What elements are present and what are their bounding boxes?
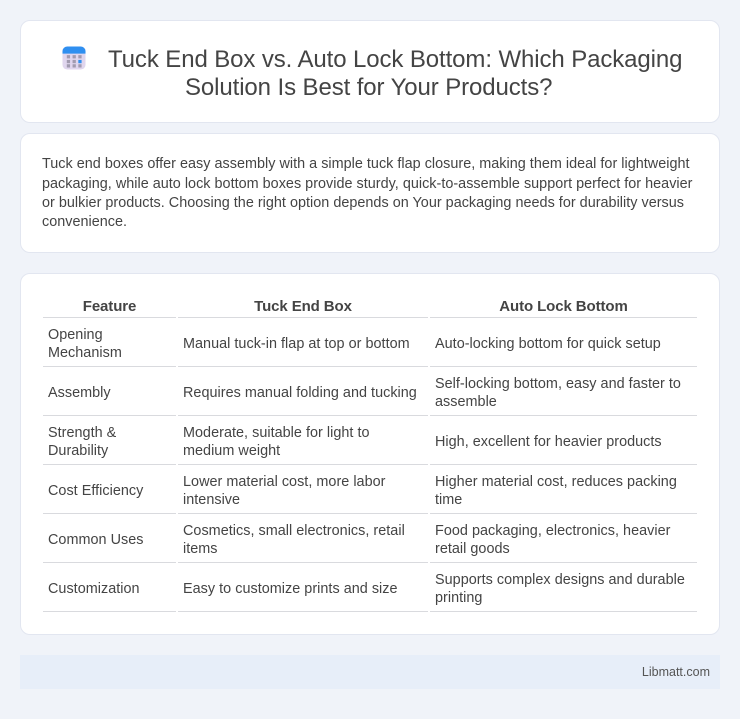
- row: opening mechanism: [43, 327, 697, 367]
- row: strength and durability: [43, 425, 697, 465]
- row: opening mechanism: Mechanism: [48, 345, 122, 361]
- header row: Auto Lock Bottom: [499, 298, 628, 315]
- row: strength and durability: Strength &: [48, 425, 116, 441]
- row: cost efficiency: Cost Efficiency: [48, 483, 143, 499]
- header panel: [20, 20, 720, 123]
- row: customization: [43, 572, 697, 612]
- row: opening mechanism: Opening: [48, 327, 103, 343]
- row: cost efficiency: Lower material cost, more labor: [183, 474, 385, 490]
- row: customization: Easy to customize prints and size: [183, 581, 398, 597]
- header row: [43, 298, 697, 318]
- row: assembly: Self-locking bottom, easy and faster to: [435, 376, 681, 392]
- header row: Tuck End Box: [254, 298, 352, 315]
- title: [108, 46, 682, 101]
- row: cost efficiency: time: [435, 492, 462, 508]
- row: cost efficiency: Higher material cost, reduces packing: [435, 474, 677, 490]
- intro text: Tuck end boxes offer easy assembly with a simple tuck flap closure, making them ideal for lightweight: [42, 156, 690, 172]
- row: assembly: Requires manual folding and tucking: [183, 385, 417, 401]
- row: opening mechanism: Manual tuck-in flap at top or bottom: [183, 336, 410, 352]
- intro text: or bulkier products. Choosing the right option depends on Your packaging needs for durability versus: [42, 195, 684, 211]
- row: strength and durability: High, excellent for heavier products: [435, 434, 662, 450]
- intro text: convenience.: [42, 214, 127, 230]
- intro text: packaging, while auto lock bottom boxes provide sturdy, quick-to-assemble support perfect for heavier: [42, 176, 692, 192]
- title: Solution Is Best for Your Products?: [185, 74, 552, 101]
- footer bar: [20, 655, 720, 689]
- row: strength and durability: medium weight: [183, 443, 280, 459]
- row: common uses: items: [183, 541, 218, 557]
- row: common uses: [43, 523, 697, 563]
- comparison table: [43, 298, 697, 612]
- intro text: [42, 156, 692, 230]
- intro panel: [20, 133, 720, 253]
- icon: calendar: [62, 46, 86, 70]
- row: cost efficiency: [43, 474, 697, 514]
- row: cost efficiency: intensive: [183, 492, 240, 508]
- row: common uses: Cosmetics, small electronics, retail: [183, 523, 405, 539]
- row: assembly: Assembly: [48, 385, 111, 401]
- row: assembly: assemble: [435, 394, 497, 410]
- row: common uses: Common Uses: [48, 532, 144, 548]
- row: strength and durability: Moderate, suitable for light to: [183, 425, 370, 441]
- row: customization: printing: [435, 590, 482, 606]
- row: customization: Supports complex designs and durable: [435, 572, 685, 588]
- header row: Feature: [83, 298, 136, 315]
- title: Tuck End Box vs. Auto Lock Bottom: Which Packaging: [108, 46, 682, 73]
- row: assembly: [43, 376, 697, 416]
- row: opening mechanism: Auto-locking bottom for quick setup: [435, 336, 661, 352]
- row: common uses: retail goods: [435, 541, 510, 557]
- row: common uses: Food packaging, electronics, heavier: [435, 523, 670, 539]
- table panel: [20, 273, 720, 635]
- footer credit: Libmatt.com: [642, 665, 710, 679]
- row: customization: Customization: [48, 581, 140, 597]
- row: strength and durability: Durability: [48, 443, 108, 459]
